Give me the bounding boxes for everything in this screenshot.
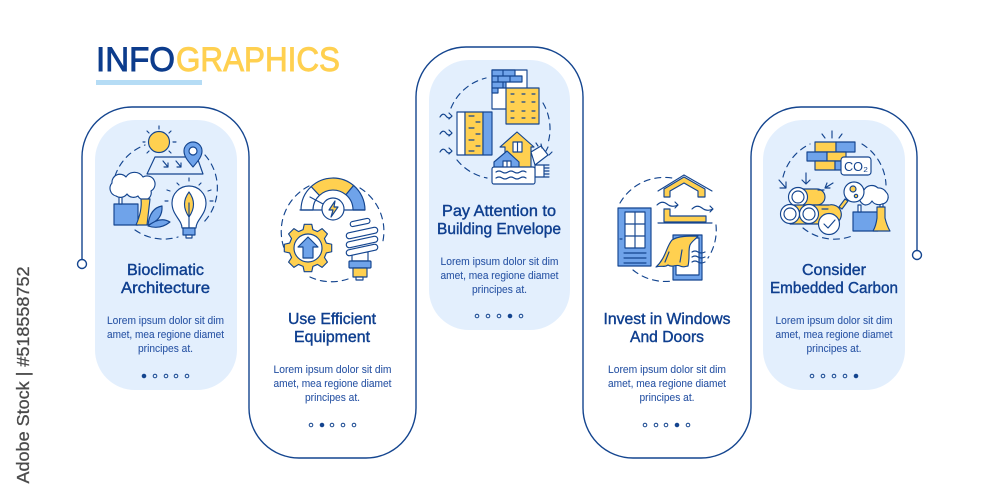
body text: Lorem ipsum dolor sit dim xyxy=(608,364,726,376)
stock credit: Adobe Stock | #518558752 xyxy=(13,266,33,484)
icon: door, roof and curtained window xyxy=(618,175,716,281)
panel: embedded carbon xyxy=(770,131,898,378)
heading: Building Envelope xyxy=(437,221,561,238)
body text: principes at. xyxy=(138,343,193,355)
panel: windows and doors xyxy=(604,175,731,427)
body text: amet, mea regione diamet xyxy=(107,329,224,341)
panel: efficient equipment xyxy=(274,178,392,427)
connecting outline xyxy=(78,47,922,458)
body text: Lorem ipsum dolor sit dim xyxy=(440,256,559,268)
body text: Lorem ipsum dolor sit dim xyxy=(274,364,392,376)
body text: Lorem ipsum dolor sit dim xyxy=(107,315,224,327)
heading: Pay Attention to xyxy=(442,203,556,220)
title: GRAPHICS xyxy=(176,41,340,79)
pagination dots xyxy=(142,374,189,378)
body text xyxy=(107,315,224,355)
body text: principes at. xyxy=(305,392,360,404)
title: INFO xyxy=(96,41,175,79)
body text xyxy=(776,315,893,355)
pagination dots xyxy=(309,423,356,427)
body text: amet, mea regione diamet xyxy=(776,329,893,341)
heading: Embedded Carbon xyxy=(770,280,898,297)
icon: bricks, wall and house xyxy=(440,70,552,184)
pagination dots xyxy=(643,423,690,427)
heading: Bioclimatic xyxy=(127,262,204,279)
heading xyxy=(288,311,377,346)
heading: Consider xyxy=(802,262,866,279)
panel: bioclimatic architecture xyxy=(107,126,224,378)
panel backgrounds xyxy=(95,60,905,390)
body text: principes at. xyxy=(640,392,694,404)
heading xyxy=(121,262,210,297)
heading: Invest in Windows xyxy=(604,311,731,328)
heading: Equipment xyxy=(294,329,371,346)
heading xyxy=(770,262,898,297)
icon: bricks, logs and factory: CO₂ xyxy=(844,159,868,174)
icon: sun, map, factory and bulb xyxy=(110,126,217,239)
body text xyxy=(608,364,726,404)
heading xyxy=(437,203,561,238)
body text xyxy=(440,256,559,296)
title xyxy=(96,41,340,85)
body text: principes at. xyxy=(806,343,862,355)
pagination dots xyxy=(475,314,523,318)
body text: amet, mea regione diamet xyxy=(274,378,392,390)
heading: Architecture xyxy=(121,280,210,297)
panel: building envelope xyxy=(437,70,561,318)
body text xyxy=(274,364,392,404)
body text: amet, mea regione diamet xyxy=(608,378,726,390)
heading: And Doors xyxy=(630,329,704,346)
icon: bricks, logs and factory xyxy=(779,131,890,239)
heading xyxy=(604,311,731,346)
heading: Use Efficient xyxy=(288,311,377,328)
body text: principes at. xyxy=(472,284,527,296)
pagination dots xyxy=(810,374,858,378)
body text: Lorem ipsum dolor sit dim xyxy=(776,315,893,327)
icon: gauge, gear and spiral bulb xyxy=(281,178,384,282)
body text: amet, mea regione diamet xyxy=(440,270,559,282)
